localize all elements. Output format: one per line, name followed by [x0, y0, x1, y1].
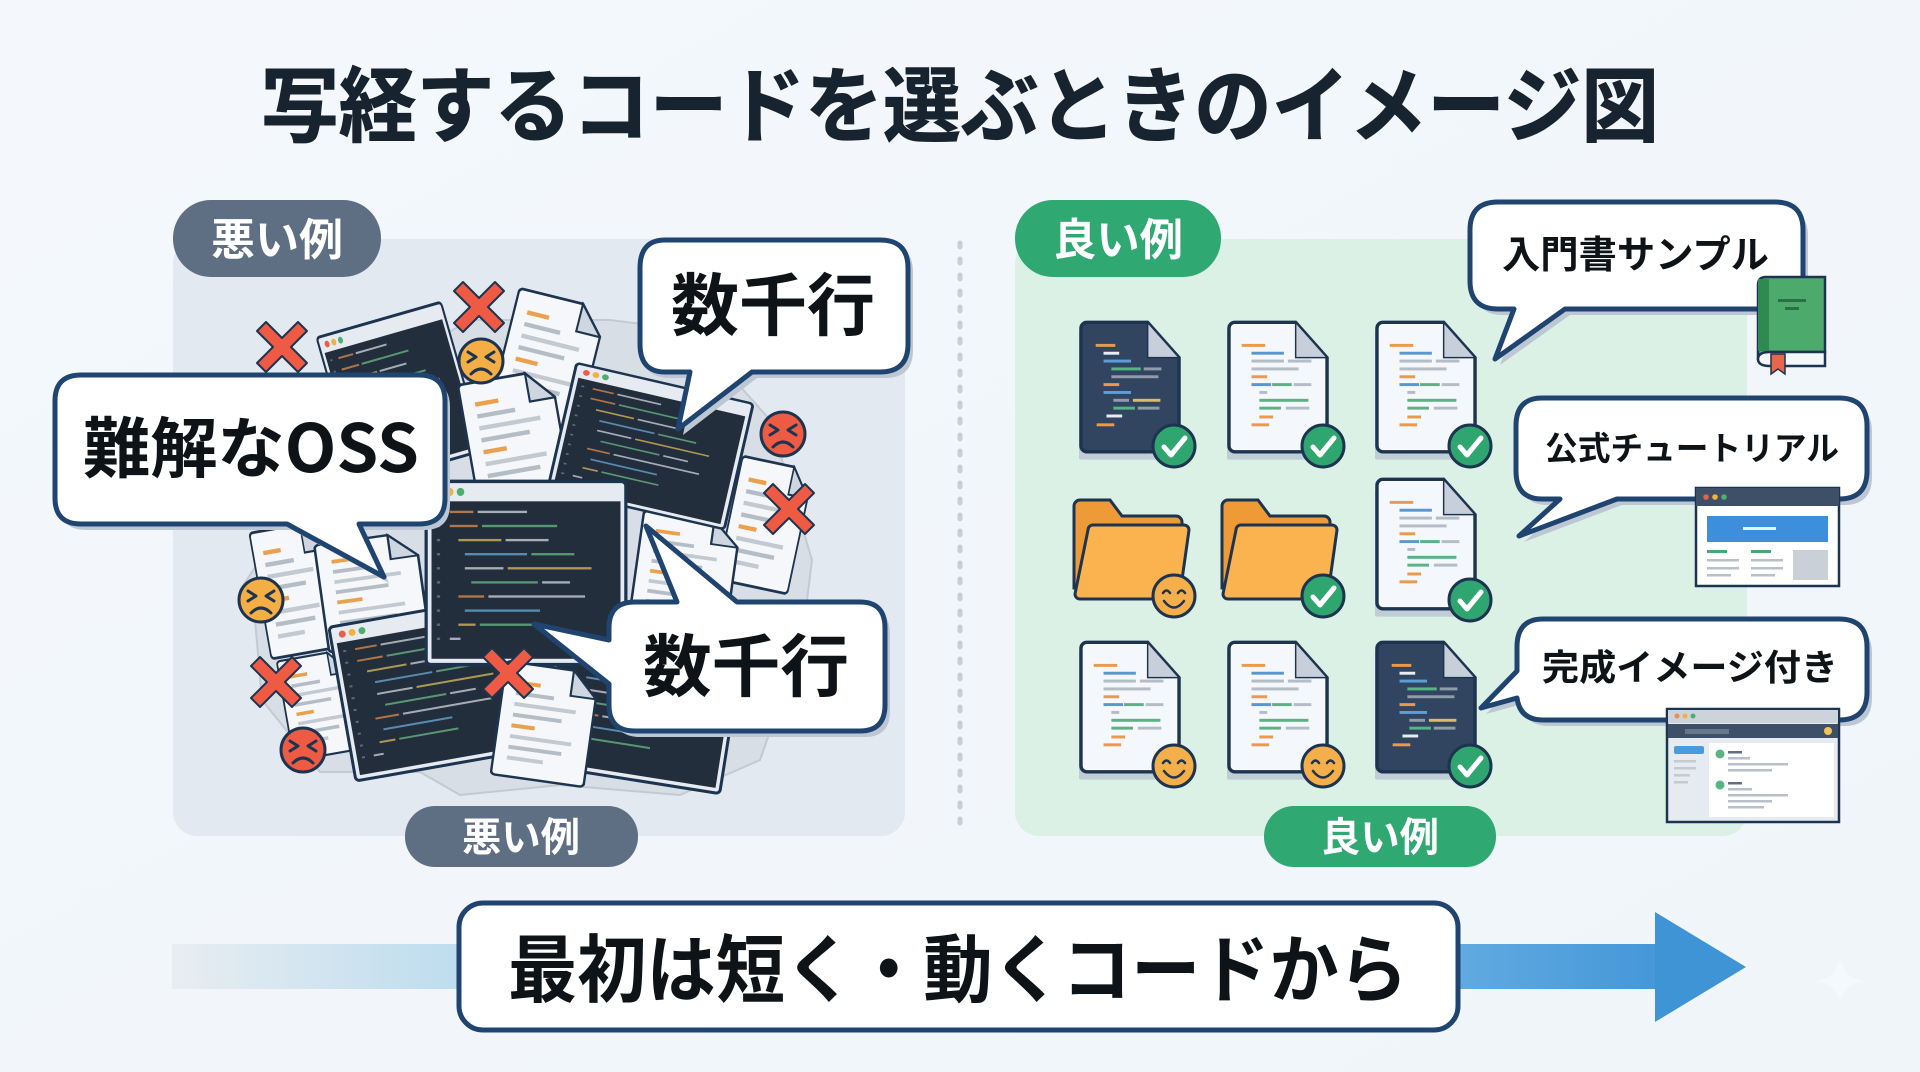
panel: bad example	[55, 200, 913, 867]
arrow: progress direction	[172, 912, 1746, 1022]
callout: thousands of lines top: 数千行	[671, 269, 875, 345]
icon: green book	[1758, 277, 1825, 374]
callout: official tutorial: 公式チュートリアル	[1545, 430, 1839, 467]
heading pill: good example bottom: 良い例	[1321, 816, 1439, 860]
icon: red x marks	[251, 282, 814, 707]
heading pill: good example bottom	[1264, 806, 1496, 867]
callout: difficult OSS: 難解なOSS	[83, 396, 419, 492]
callout: with finished image	[1481, 619, 1872, 726]
icon: tutorial browser window	[1696, 488, 1839, 586]
callout: with finished image: 完成イメージ付き	[1542, 647, 1838, 688]
callout: thousands of lines bottom: 数千行	[643, 630, 849, 706]
icon: angry faces	[239, 339, 805, 772]
heading pill: bad example bottom: 悪い例	[462, 816, 580, 860]
title: 写経するコードを選ぶときのイメージ図	[261, 62, 1659, 153]
banner: start with short working code: 最初は短く・動くコードから	[508, 929, 1408, 1012]
heading pill: bad example top	[173, 200, 381, 277]
panel: good example	[1015, 200, 1872, 867]
heading pill: good example top	[1015, 200, 1221, 277]
heading pill: bad example top: 悪い例	[211, 216, 343, 265]
banner: start with short working code	[459, 903, 1458, 1030]
pile of code files	[240, 288, 813, 795]
heading pill: bad example bottom	[405, 806, 638, 867]
icon: app screenshot window	[1667, 709, 1839, 822]
callout: thousands of lines bottom	[534, 526, 890, 737]
icon: status badges	[1153, 425, 1491, 787]
callout: intro book sample: 入門書サンプル	[1502, 235, 1769, 277]
callout: thousands of lines top	[640, 240, 913, 435]
heading pill: good example top: 良い例	[1053, 216, 1183, 265]
callout: intro book sample	[1470, 202, 1808, 365]
callout: official tutorial	[1516, 398, 1872, 542]
file grid	[1074, 322, 1475, 780]
callout: difficult OSS	[55, 375, 450, 583]
